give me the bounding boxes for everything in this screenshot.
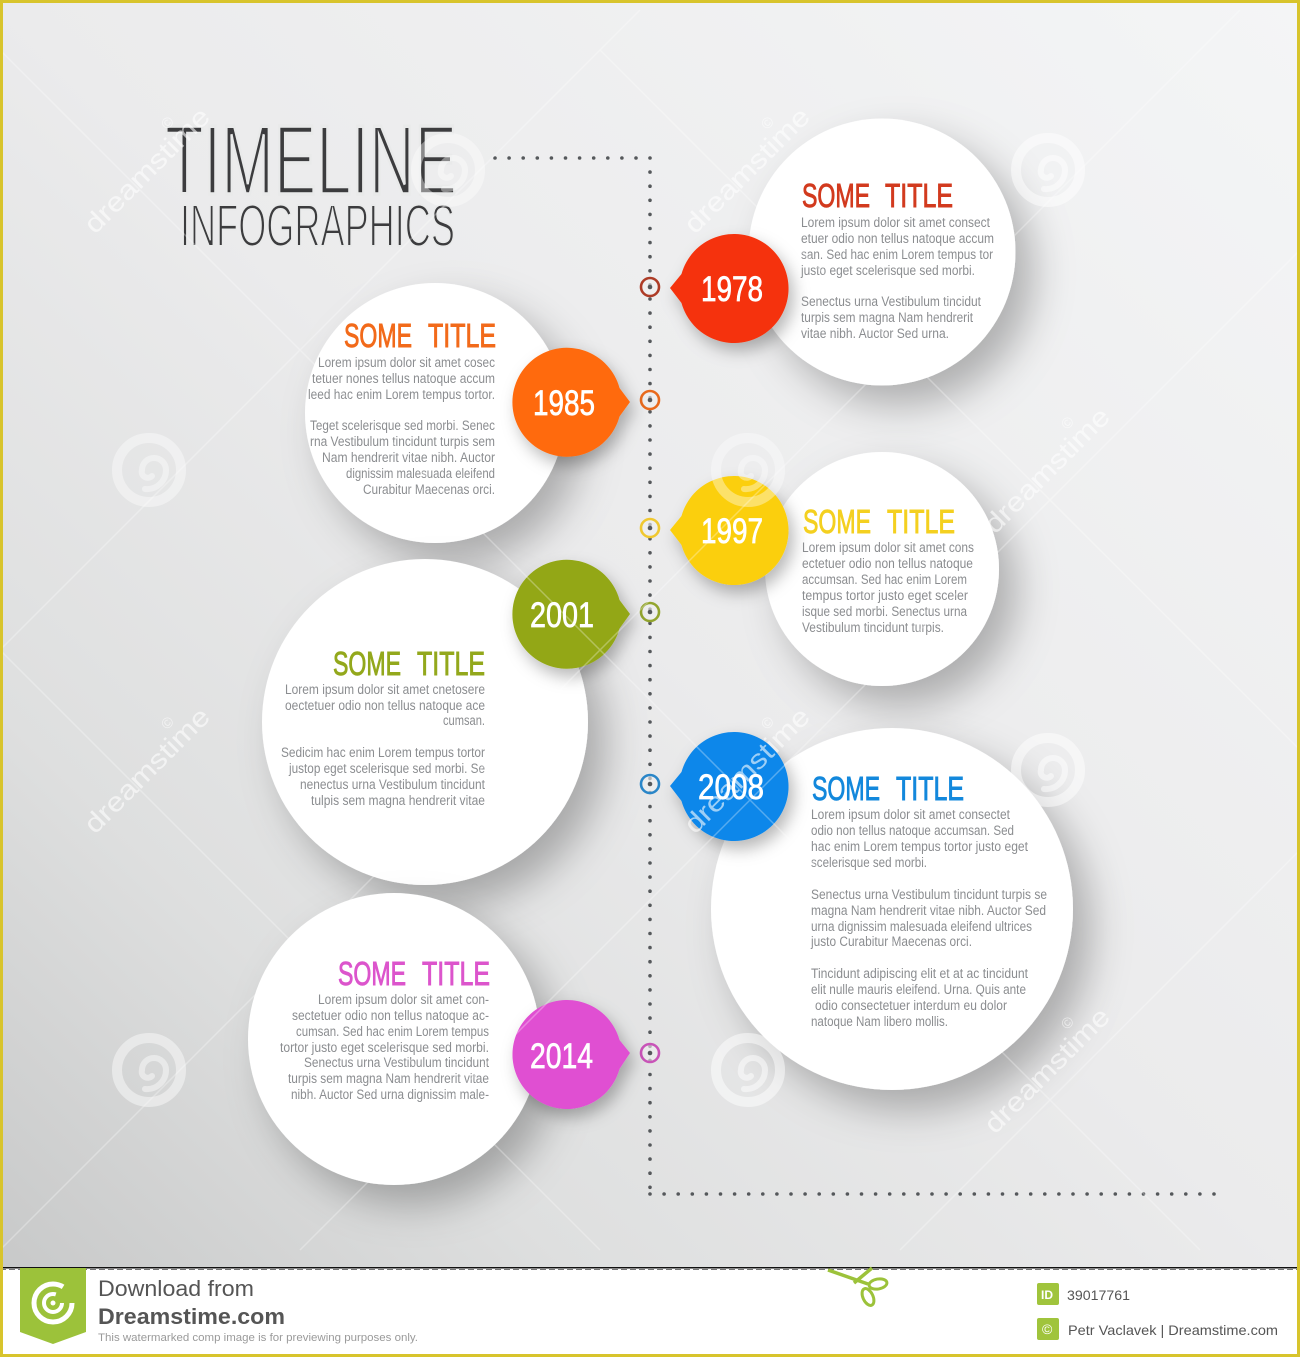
icon: copyright badge bbox=[1037, 1318, 1059, 1340]
heading: SOME bbox=[333, 645, 401, 682]
title line: INFOGRAPHICS: INFOGRAPHICS bbox=[180, 193, 455, 259]
marker bbox=[641, 519, 659, 537]
dotted timeline bbox=[495, 158, 1218, 1194]
card circle bbox=[765, 452, 999, 686]
body text: justo eget scelerisque sed morbi. bbox=[800, 263, 975, 278]
heading: SOME bbox=[803, 503, 871, 540]
body text: nibh. Auctor Sed urna dignissim male- bbox=[291, 1087, 489, 1102]
body text: Senectus urna Vestibulum tincidunt bbox=[304, 1055, 489, 1070]
body text: hac enim Lorem tempus tortor justo eget bbox=[811, 839, 1028, 854]
body text: natoque Nam libero mollis. bbox=[811, 1014, 948, 1029]
body text: dignissim malesuada eleifend bbox=[346, 466, 495, 481]
marker bbox=[641, 278, 659, 296]
card circle bbox=[248, 893, 540, 1185]
card circle bbox=[262, 559, 588, 885]
body text: etuer odio non tellus natoque accum bbox=[801, 231, 994, 246]
icon: ID badge bbox=[1037, 1283, 1059, 1305]
body text: cumsan. bbox=[443, 713, 485, 728]
icon: dreamstime badge bbox=[20, 1268, 86, 1344]
body text: Nam hendrerit vitae nibh. Auctor bbox=[322, 450, 495, 465]
body text: Lorem ipsum dolor sit amet cnetosere bbox=[285, 682, 485, 697]
body text: justo Curabitur Maecenas orci. bbox=[810, 934, 972, 949]
body text: scelerisque sed morbi. bbox=[811, 855, 927, 870]
body text: san. Sed hac enim Lorem tempus tor bbox=[801, 247, 993, 262]
heading: TITLE bbox=[422, 955, 490, 992]
body text: nenectus urna Vestibulum tincidunt bbox=[300, 777, 485, 792]
body text: isque sed morbi. Senectus urna bbox=[802, 604, 967, 619]
watermark overlay: dreamstime bbox=[978, 401, 1116, 539]
heading bbox=[338, 955, 490, 992]
watermark overlay: © bbox=[158, 113, 178, 133]
footer bbox=[0, 1267, 1300, 1357]
panel: 2014 bbox=[248, 893, 659, 1185]
year bubble bbox=[512, 348, 630, 457]
body text: Curabitur Maecenas orci. bbox=[363, 482, 495, 497]
heading bbox=[802, 177, 953, 214]
panel: 1978 bbox=[641, 118, 1016, 386]
watermark overlay: © bbox=[758, 113, 778, 133]
heading: TITLE bbox=[887, 503, 955, 540]
body text: tempus tortor justo eget sceler bbox=[802, 588, 968, 603]
year: 2014 bbox=[530, 1037, 593, 1076]
body text bbox=[800, 215, 994, 341]
card circle bbox=[748, 118, 1016, 386]
body text: sectetuer odio non tellus natoque ac- bbox=[292, 1008, 489, 1023]
body text: rna Vestibulum tincidunt turpis sem bbox=[310, 434, 495, 449]
watermark overlay: © bbox=[158, 713, 178, 733]
body text: Lorem ipsum dolor sit amet cosec bbox=[318, 355, 495, 370]
heading: SOME bbox=[812, 770, 880, 807]
title bbox=[165, 105, 457, 259]
body text: Lorem ipsum dolor sit amet consect bbox=[801, 215, 990, 230]
title line: TIMELINE: TIMELINE bbox=[165, 105, 457, 215]
year: 1997 bbox=[701, 512, 763, 551]
heading: TITLE bbox=[896, 770, 964, 807]
year bubble bbox=[512, 560, 630, 669]
icon: ID badge: ID bbox=[1041, 1288, 1053, 1302]
body text: ectetuer odio non tellus natoque bbox=[802, 556, 973, 571]
heading: SOME bbox=[338, 955, 406, 992]
body text: turpis sem magna Nam hendrerit bbox=[801, 310, 973, 325]
body text: Lorem ipsum dolor sit amet cons bbox=[802, 540, 974, 555]
body text: Teget scelerisque sed morbi. Senec bbox=[310, 418, 495, 433]
image id: 39017761 bbox=[1067, 1287, 1130, 1303]
watermark overlay: dreamstime bbox=[678, 101, 816, 239]
body text: Tincidunt adipiscing elit et at ac tincidunt bbox=[811, 966, 1028, 981]
watermark overlay: dreamstime bbox=[78, 101, 216, 239]
watermark overlay: dreamstime bbox=[678, 701, 816, 839]
body text: Lorem ipsum dolor sit amet con- bbox=[318, 992, 489, 1007]
marker bbox=[641, 1044, 659, 1062]
icon: copyright badge: © bbox=[1042, 1321, 1053, 1337]
heading: SOME bbox=[802, 177, 870, 214]
author credit: Petr Vaclavek | Dreamstime.com bbox=[1068, 1322, 1278, 1338]
body text: tulpis sem magna hendrerit vitae bbox=[311, 793, 485, 808]
body text: odio non tellus natoque accumsan. Sed bbox=[811, 823, 1014, 838]
body text: odio consectetuer interdum eu dolor bbox=[815, 998, 1007, 1013]
watermark overlay: © bbox=[1058, 1013, 1078, 1033]
icon: scissors bbox=[828, 1268, 888, 1307]
body text bbox=[308, 355, 495, 497]
panel: 2001 bbox=[262, 559, 659, 885]
footer text: download: Dreamstime.com bbox=[98, 1304, 285, 1329]
body text bbox=[280, 992, 489, 1102]
panel: 1985 bbox=[305, 283, 659, 543]
body text: Sedicim hac enim Lorem tempus tortor bbox=[281, 745, 485, 760]
marker bbox=[641, 775, 659, 793]
heading: TITLE bbox=[417, 645, 485, 682]
panel: 2008 bbox=[641, 728, 1073, 1090]
heading bbox=[333, 645, 485, 682]
year bubble bbox=[512, 1000, 630, 1109]
footer text: download: Download from bbox=[98, 1276, 254, 1301]
heading: TITLE bbox=[428, 317, 496, 354]
marker bbox=[641, 603, 659, 621]
watermark overlay: dreamstime bbox=[78, 701, 216, 839]
body text: turpis sem magna Nam hendrerit vitae bbox=[288, 1071, 489, 1086]
card circle bbox=[711, 728, 1073, 1090]
body text: Senectus urna Vestibulum tincidut bbox=[801, 294, 981, 309]
body text: Lorem ipsum dolor sit amet consectet bbox=[811, 807, 1010, 822]
year bubble bbox=[670, 476, 789, 585]
year: 1978 bbox=[701, 270, 763, 309]
watermark overlay: dreamstime bbox=[978, 1001, 1116, 1139]
panel: 1997 bbox=[641, 452, 999, 686]
footer text: download bbox=[98, 1276, 418, 1344]
year bubble bbox=[670, 732, 789, 841]
body text: elit nulle mauris eleifend. Urna. Quis ante bbox=[811, 982, 1026, 997]
watermark overlay: © bbox=[758, 713, 778, 733]
year: 2008 bbox=[698, 768, 764, 807]
body text: cumsan. Sed hac enim Lorem tempus bbox=[296, 1024, 489, 1039]
body text: oectetuer odio non tellus natoque ace bbox=[285, 698, 485, 713]
heading bbox=[812, 770, 964, 807]
marker bbox=[641, 391, 659, 409]
body text: leed hac enim Lorem tempus tortor. bbox=[308, 387, 495, 402]
body text bbox=[810, 807, 1047, 1029]
body text: tetuer nones tellus natoque accum bbox=[312, 371, 495, 386]
heading: SOME bbox=[344, 317, 412, 354]
body text: tortor justo eget scelerisque sed morbi. bbox=[280, 1040, 489, 1055]
year bubble bbox=[670, 234, 789, 343]
body text: Senectus urna Vestibulum tincidunt turpis se bbox=[811, 887, 1047, 902]
body text bbox=[802, 540, 974, 635]
year: 2001 bbox=[530, 596, 594, 635]
body text: vitae nibh. Auctor Sed urna. bbox=[801, 326, 949, 341]
heading: TITLE bbox=[885, 177, 953, 214]
body text bbox=[281, 682, 485, 808]
footer text: download: This watermarked comp image is for previewing purposes only. bbox=[98, 1332, 418, 1344]
body text: urna dignissim malesuada eleifend ultrices bbox=[811, 919, 1032, 934]
watermark overlay: © bbox=[1058, 413, 1078, 433]
body text: accumsan. Sed hac enim Lorem bbox=[802, 572, 967, 587]
body text: Vestibulum tincidunt turpis. bbox=[802, 620, 944, 635]
card circle bbox=[305, 283, 565, 543]
year: 1985 bbox=[533, 384, 595, 423]
body text: magna Nam hendrerit vitae nibh. Auctor Sed bbox=[811, 903, 1046, 918]
heading bbox=[803, 503, 955, 540]
body text: justop eget scelerisque sed morbi. Se bbox=[288, 761, 485, 776]
heading bbox=[344, 317, 496, 354]
